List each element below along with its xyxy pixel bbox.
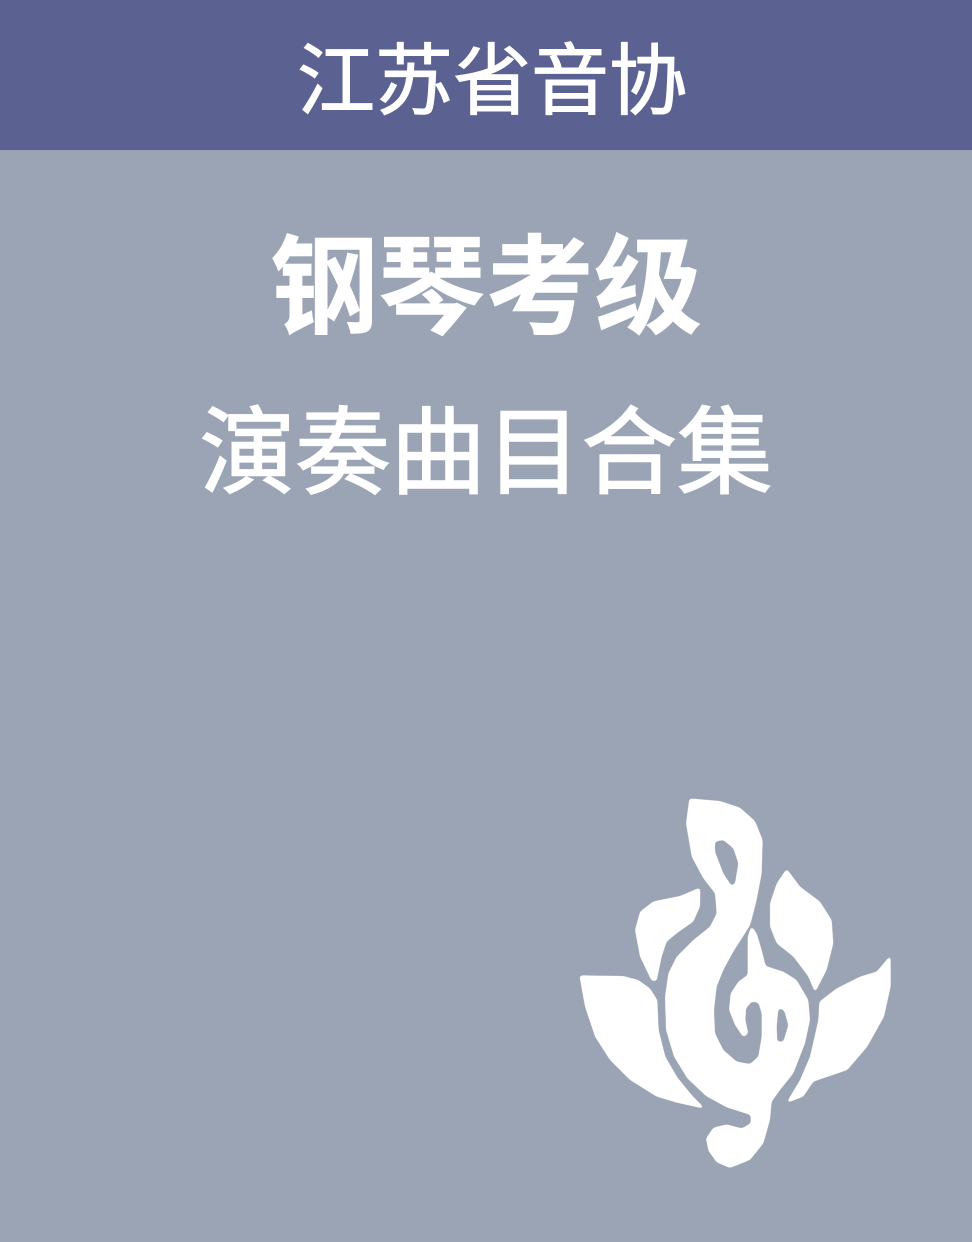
icon: treble clef and leaves logo bbox=[580, 798, 891, 1168]
subtitle: 演奏曲目合集 bbox=[200, 401, 772, 507]
main title: 钢琴考级 bbox=[270, 227, 702, 348]
header band bbox=[0, 0, 972, 150]
header title: 江苏省音协 bbox=[297, 37, 687, 125]
